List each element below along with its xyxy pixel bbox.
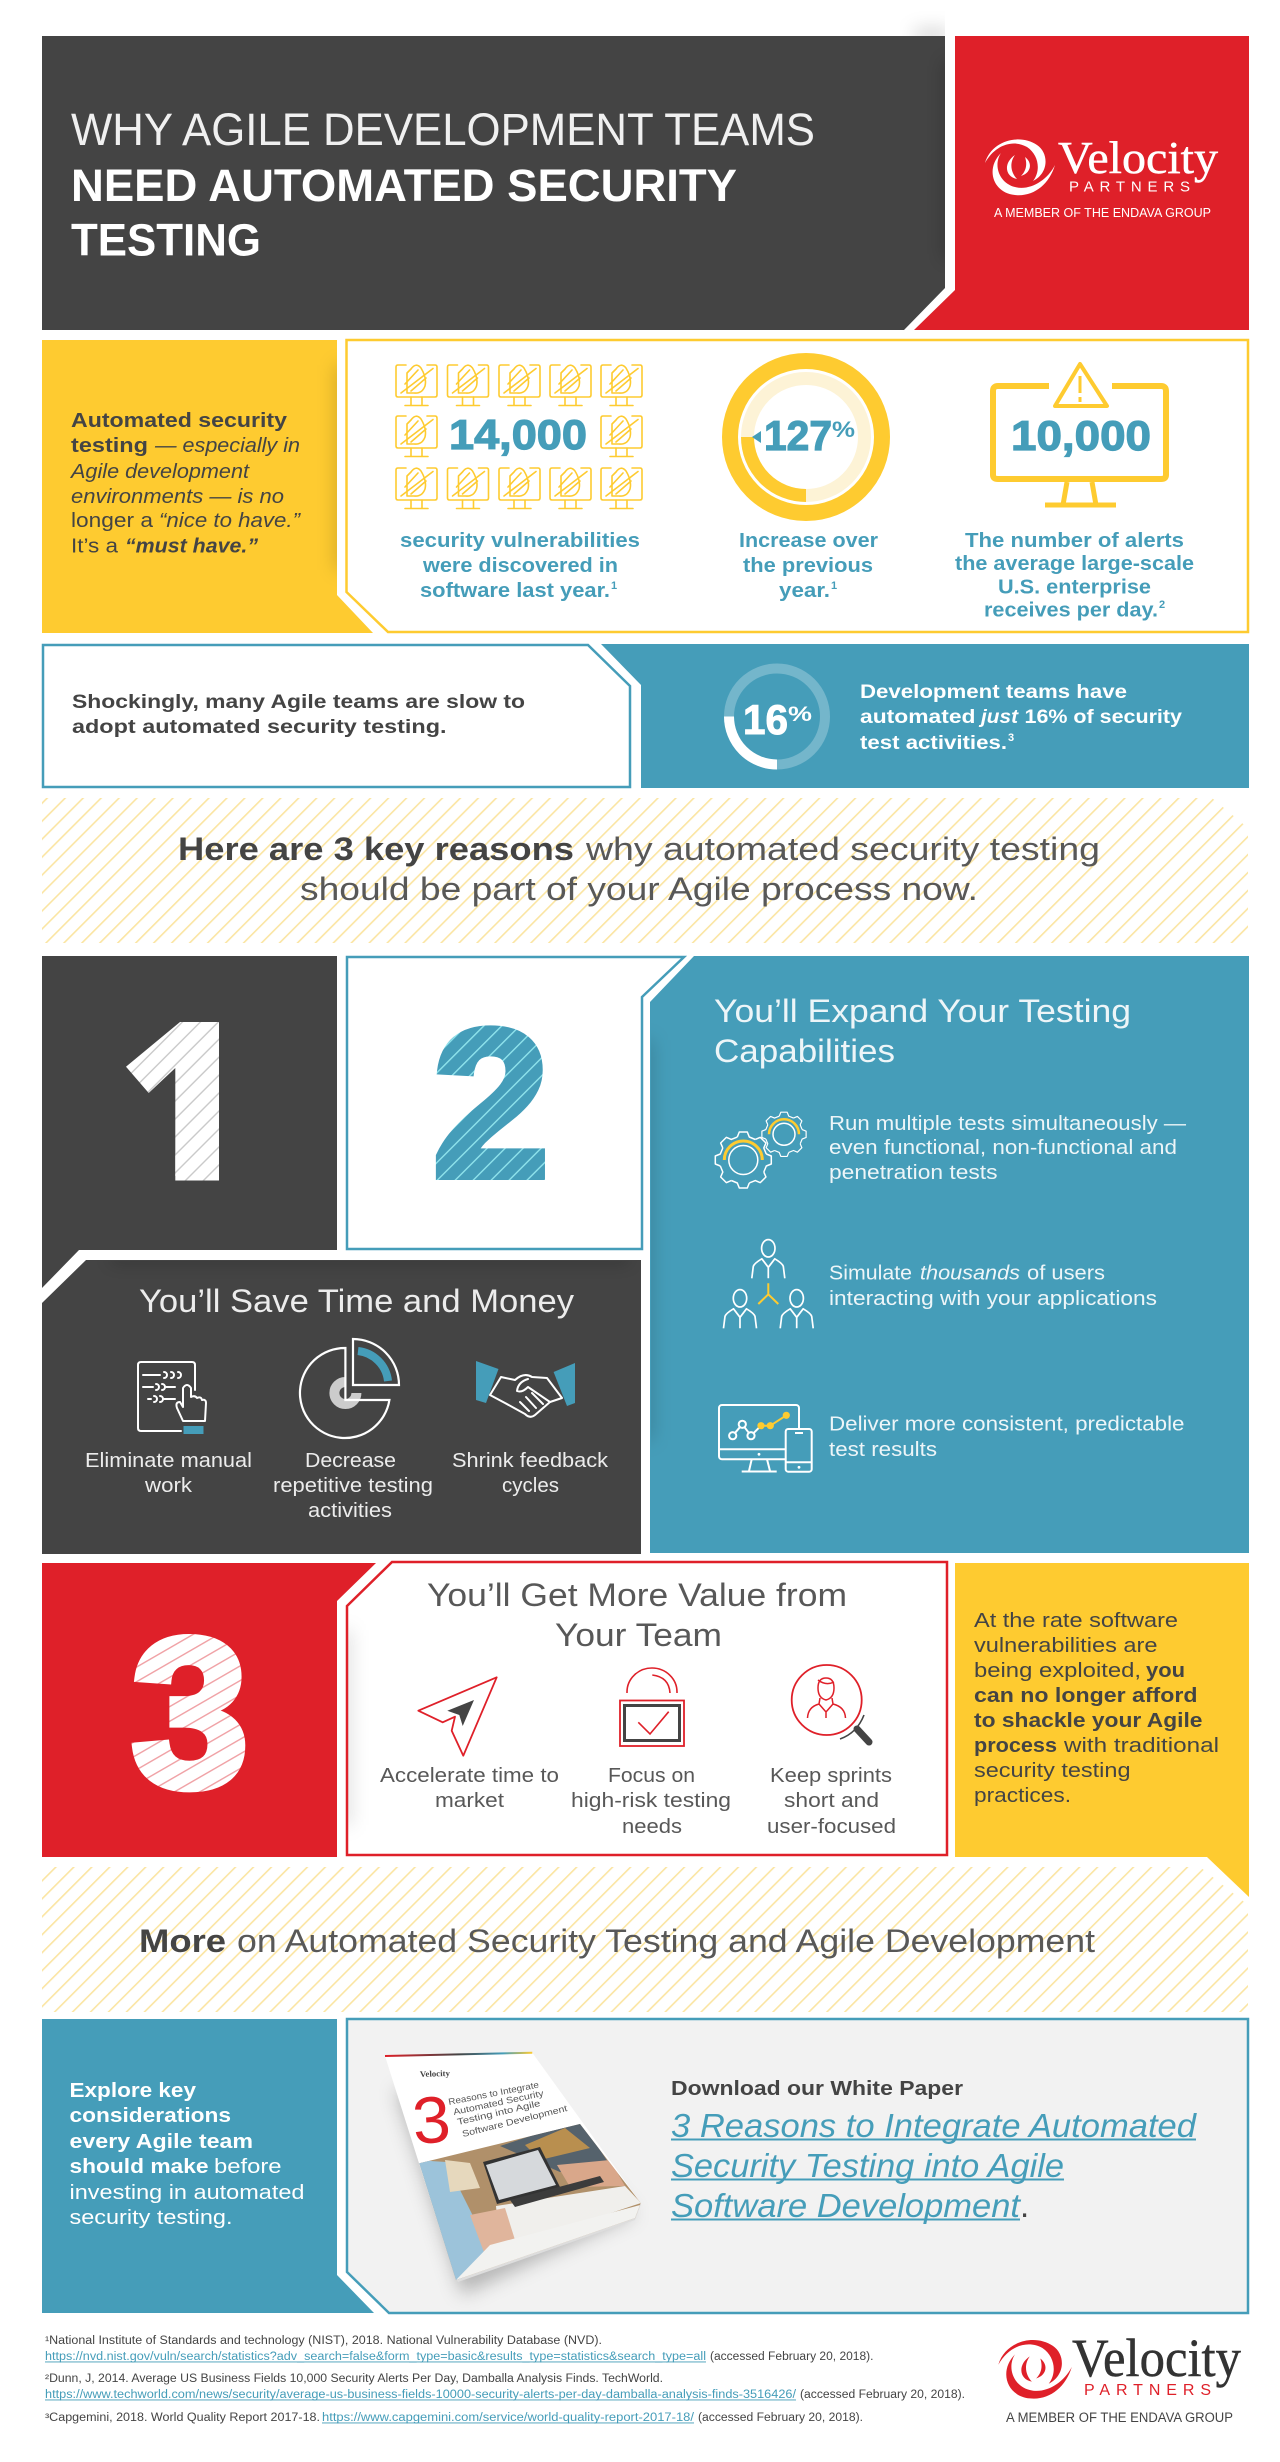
text block: Explore key xyxy=(70,2080,197,2102)
text: simulate users: thousands xyxy=(920,1262,1020,1284)
callout text xyxy=(72,692,525,738)
chart: 127% donut: 127 xyxy=(764,412,832,459)
callout text: adopt automated security testing. xyxy=(72,717,446,738)
chart: 16% donut: % xyxy=(788,703,812,726)
link: white paper title: 3 Reasons to Integrate Automated xyxy=(671,2107,1198,2144)
title xyxy=(71,104,815,266)
panel: number 1 xyxy=(42,956,337,1288)
footnotes xyxy=(45,2335,965,2424)
text: 16% statistic: automated xyxy=(860,707,976,728)
heading xyxy=(427,1577,847,1653)
callout text: practices. xyxy=(974,1785,1071,1807)
panel: slow to adopt xyxy=(43,645,630,787)
panel: must have intro xyxy=(42,340,373,633)
white paper booklet xyxy=(380,2053,650,2295)
numeral 2: 2 xyxy=(433,986,549,1221)
text block: should make xyxy=(70,2156,208,2178)
footer logo xyxy=(998,2328,1241,2425)
caption: vulnerabilities: security vulnerabilities xyxy=(400,530,640,552)
panel: save time and money xyxy=(42,1254,641,1554)
heading: Your Team xyxy=(555,1617,722,1653)
icon: handshake xyxy=(476,1361,575,1417)
heading band: 3 key reasons: why automated security testing xyxy=(585,831,1100,867)
text: run multiple tests: even functional, non-functional and xyxy=(829,1137,1177,1159)
text: download heading: Download our White Paper xyxy=(671,2078,963,2100)
footer logo: PARTNERS xyxy=(1084,2382,1211,2399)
text: 16% statistic: 3 xyxy=(1008,732,1014,744)
intro text xyxy=(70,410,301,558)
icon: alert monitor with 10,000 xyxy=(993,364,1166,505)
panel: explore considerations xyxy=(42,2019,374,2313)
captions: Focus on xyxy=(608,1765,695,1787)
footer logo: Velocity xyxy=(1072,2328,1241,2388)
chart: 127% donut: % xyxy=(832,417,855,442)
text: 16% statistic: 16% of security xyxy=(1024,707,1182,728)
icon: Velocity swirl logo xyxy=(985,139,1055,195)
caption: alerts: the average large-scale xyxy=(955,553,1194,575)
callout text: can no longer afford xyxy=(974,1685,1198,1707)
text: simulate users: of users xyxy=(1027,1262,1105,1284)
intro text: — especially in xyxy=(154,435,300,457)
captions: user-focused xyxy=(767,1816,896,1838)
intro text: “nice to have.” xyxy=(159,510,301,532)
icon: devices with chart xyxy=(719,1405,812,1472)
link: white paper title: . xyxy=(1020,2187,1029,2224)
caption: vulnerabilities: software last year. xyxy=(420,580,610,602)
icon: magnifier with person xyxy=(792,1665,869,1742)
booklet title: Testing into Agile xyxy=(456,2098,541,2127)
icon: users xyxy=(724,1240,813,1328)
captions xyxy=(380,1765,896,1838)
intro text: Automated security xyxy=(71,410,288,432)
footnotes: (accessed February 20, 2018). xyxy=(710,2351,874,2363)
captions: Keep sprints xyxy=(770,1765,892,1787)
icon: pie chart xyxy=(300,1339,399,1438)
callout text: with traditional xyxy=(1063,1735,1219,1757)
callout text: Shockingly, many Agile teams are slow to xyxy=(72,692,525,713)
caption: increase xyxy=(739,530,878,602)
title: WHY AGILE DEVELOPMENT TEAMS xyxy=(71,104,815,155)
text: deliver results: test results xyxy=(829,1439,937,1461)
text block: security testing. xyxy=(70,2207,232,2229)
text: 16% statistic: just xyxy=(978,707,1019,728)
intro text: “must have.” xyxy=(125,536,258,558)
captions: market xyxy=(435,1790,504,1812)
text: simulate users xyxy=(829,1262,1157,1310)
callout text: security testing xyxy=(974,1760,1130,1782)
heading: You’ll Get More Value from xyxy=(427,1577,847,1613)
stat: 14,000: 14,000 xyxy=(449,411,587,458)
heading band: 3 key reasons: Here are 3 key reasons xyxy=(178,831,574,867)
panel: download white paper xyxy=(347,2019,1248,2313)
panel: vulnerability statistics xyxy=(346,340,1248,632)
panel: header title xyxy=(42,30,954,330)
link: white paper title xyxy=(671,2107,1198,2224)
caption: increase: Increase over xyxy=(739,530,878,552)
footnotes: ³Capgemini, 2018. World Quality Report 2017-18. xyxy=(45,2412,320,2424)
panel: number 3 xyxy=(42,1563,376,1857)
chart: 16% donut xyxy=(729,668,825,764)
footnotes: (accessed February 20, 2018). xyxy=(698,2412,863,2424)
panel: yellow callout xyxy=(955,1563,1249,1897)
footnotes: ¹National Institute of Standards and technology (NIST), 2018. National Vulnerability Database (NVD). xyxy=(45,2335,602,2347)
caption: vulnerabilities: 1 xyxy=(611,580,617,592)
chart: 16% donut: 16 xyxy=(743,696,788,743)
footnotes: ²Dunn, J, 2014. Average US Business Fields 10,000 Security Alerts Per Day, Damballa Analysis Finds. TechWorld. xyxy=(45,2373,663,2385)
text: run multiple tests xyxy=(829,1113,1186,1184)
intro text: Agile development xyxy=(70,461,251,483)
callout text: being exploited, xyxy=(974,1660,1141,1682)
captions: cycles xyxy=(502,1475,559,1497)
caption: vulnerabilities xyxy=(400,530,640,602)
logo wordmark: Velocity xyxy=(1058,132,1218,183)
text: run multiple tests: penetration tests xyxy=(829,1162,998,1184)
numeral 3: 3 xyxy=(131,1594,249,1831)
numeral 1: 1 xyxy=(132,980,253,1223)
chart: 127% donut xyxy=(730,361,882,513)
heading band: 3 key reasons: should be part of your Agile process now. xyxy=(300,871,978,907)
captions: Accelerate time to xyxy=(380,1765,559,1787)
booklet title: Automated Security xyxy=(452,2088,545,2117)
footnotes: https://www.capgemini.com/service/world-quality-report-2017-18/ xyxy=(322,2412,695,2424)
captions: Shrink feedback xyxy=(452,1450,609,1472)
heading: Capabilities xyxy=(714,1033,895,1069)
icon: padlock with check xyxy=(620,1668,684,1746)
icon: paper plane xyxy=(418,1677,497,1756)
logo wordmark: PARTNERS xyxy=(1069,178,1190,196)
text block: considerations xyxy=(70,2105,231,2127)
intro text: longer a xyxy=(71,510,154,532)
caption: alerts xyxy=(955,530,1194,622)
captions: repetitive testing xyxy=(273,1475,433,1497)
logo wordmark: A MEMBER OF THE ENDAVA GROUP xyxy=(994,205,1211,220)
captions: needs xyxy=(622,1816,682,1838)
heading band: more on automated security testing: on Automated Security Testing and Agile Development xyxy=(237,1923,1095,1959)
text block: every Agile team xyxy=(70,2131,253,2153)
text: 16% statistic xyxy=(860,682,1182,754)
text: deliver results: Deliver more consistent, predictable xyxy=(829,1414,1184,1436)
callout text xyxy=(974,1610,1219,1807)
heading xyxy=(714,993,1131,1069)
text block xyxy=(70,2080,304,2229)
intro text: testing xyxy=(71,435,148,457)
caption: increase: 1 xyxy=(831,580,837,592)
title: TESTING xyxy=(71,214,261,266)
text block: before xyxy=(214,2156,282,2178)
heading band: 3 key reasons xyxy=(42,798,1248,943)
caption: alerts: The number of alerts xyxy=(965,530,1184,552)
heading band: more on automated security testing xyxy=(42,1867,1248,2012)
link: white paper title: Security Testing into Agile xyxy=(671,2147,1064,2184)
panel: more value from team xyxy=(339,1562,947,1855)
callout text: to shackle your Agile xyxy=(974,1710,1202,1732)
intro text: It’s a xyxy=(71,536,119,558)
text: simulate users: interacting with your applications xyxy=(829,1288,1157,1310)
booklet logo: Velocity xyxy=(420,2068,451,2079)
booklet title xyxy=(447,2080,569,2139)
captions: short and xyxy=(784,1790,879,1812)
caption: increase: the previous xyxy=(743,555,873,577)
caption: vulnerabilities: were discovered in xyxy=(422,555,618,577)
caption: alerts: 2 xyxy=(1159,599,1165,611)
captions: high-risk testing xyxy=(571,1790,731,1812)
text block: investing in automated xyxy=(70,2182,304,2204)
intro text: environments — is no xyxy=(71,486,284,508)
logo wordmark xyxy=(994,132,1218,220)
title: NEED AUTOMATED SECURITY xyxy=(71,160,737,211)
captions: Eliminate manual xyxy=(85,1450,252,1472)
callout text: process xyxy=(974,1735,1057,1757)
text: simulate users: Simulate xyxy=(829,1262,912,1284)
icon: manual document with hand xyxy=(138,1362,206,1434)
icon grid: bugged monitors xyxy=(396,365,642,508)
panel: expand testing capabilities xyxy=(640,956,1249,1553)
footnotes: (accessed February 20, 2018). xyxy=(800,2389,965,2401)
heading: You’ll Expand Your Testing xyxy=(714,993,1131,1029)
text: 16% statistic: Development teams have xyxy=(860,682,1127,703)
captions: activities xyxy=(308,1500,392,1522)
heading: You’ll Save Time and Money xyxy=(139,1283,574,1319)
panel: 16% automated xyxy=(601,644,1249,788)
caption: increase: year. xyxy=(779,580,830,602)
link: white paper title: Software Development xyxy=(671,2187,1022,2224)
text: run multiple tests: Run multiple tests simultaneously — xyxy=(829,1113,1186,1135)
booklet title: Reasons to Integrate xyxy=(447,2080,540,2107)
captions: Decrease xyxy=(305,1450,396,1472)
callout text: At the rate software xyxy=(974,1610,1178,1632)
footer logo: A MEMBER OF THE ENDAVA GROUP xyxy=(1006,2410,1233,2425)
icon: gears xyxy=(715,1112,806,1188)
callout text: you xyxy=(1146,1660,1185,1682)
booklet title: Software Development xyxy=(461,2103,569,2139)
footnotes: https://nvd.nist.gov/vuln/search/statistics?adv_search=false&form_type=basic&results_type=statistics&search_type=all xyxy=(45,2351,706,2363)
captions: work xyxy=(144,1475,193,1497)
caption: alerts: receives per day. xyxy=(984,600,1158,622)
footnotes: https://www.techworld.com/news/security/average-us-business-fields-10000-security-alerts-per-day-damballa-analysis-finds-3516426/ xyxy=(45,2389,797,2401)
booklet numeral: 3 xyxy=(410,2081,453,2158)
callout text: vulnerabilities are xyxy=(974,1635,1158,1657)
caption: alerts: U.S. enterprise xyxy=(998,576,1151,598)
text: deliver results xyxy=(829,1414,1184,1461)
captions xyxy=(85,1450,609,1522)
icon: alert monitor with 10,000: 10,000 xyxy=(1011,412,1151,459)
panel: red logo xyxy=(914,36,1249,330)
text: 16% statistic: test activities. xyxy=(860,733,1007,754)
panel: number 2 xyxy=(347,957,684,1249)
heading band: more on automated security testing: More xyxy=(139,1923,226,1959)
